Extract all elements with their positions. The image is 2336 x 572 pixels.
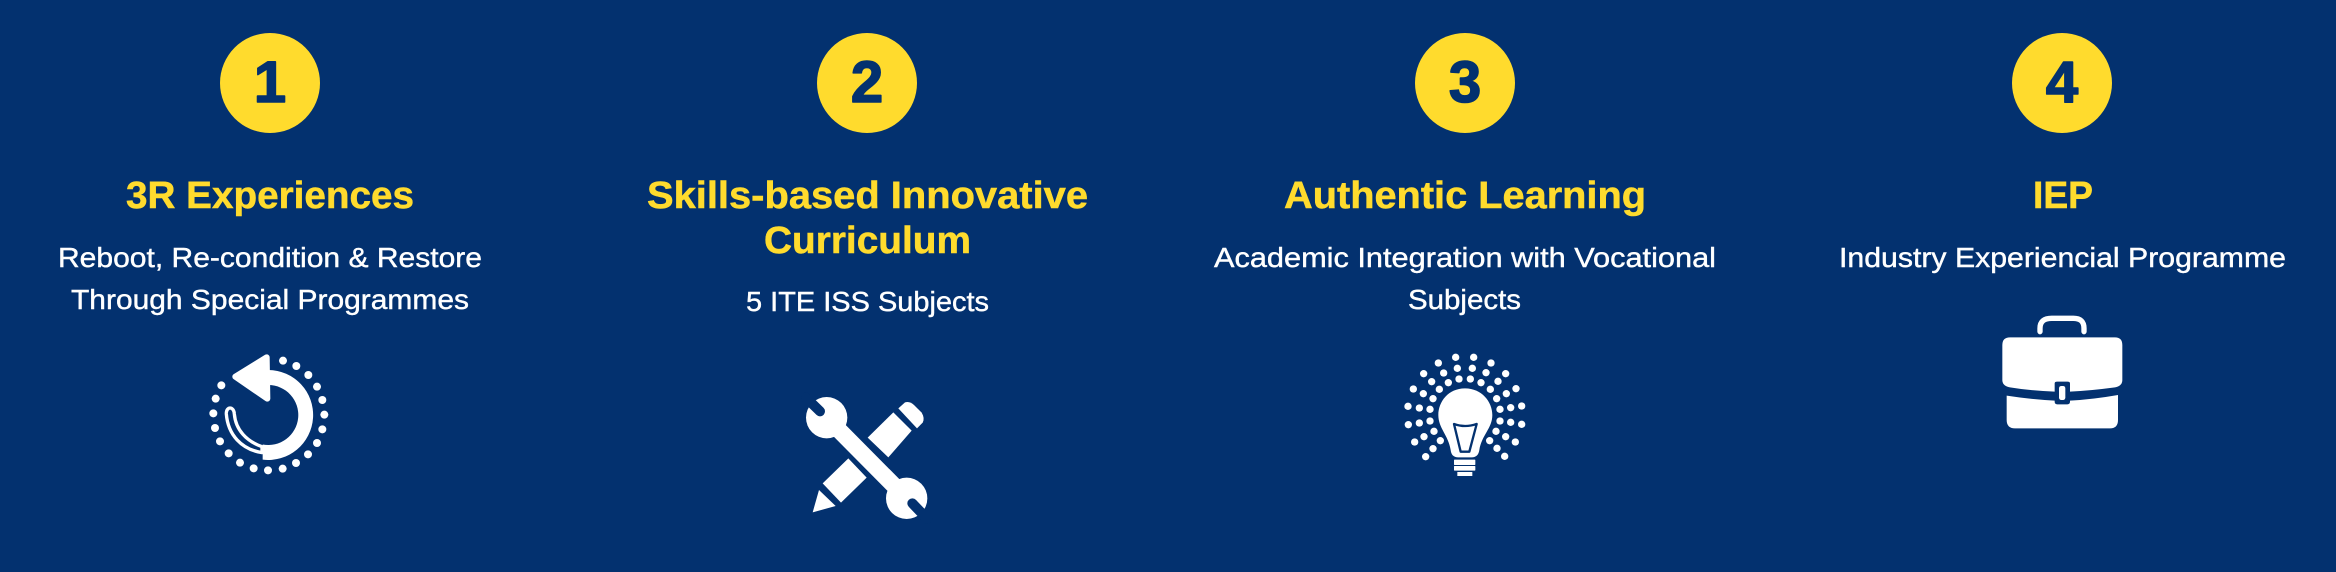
icon: restart arrow [209, 357, 328, 474]
number badge 2: 2 [851, 50, 883, 115]
description: 5 ITE ISS Subjects: 5 ITE ISS Subjects [746, 286, 989, 317]
panel: Skills-based Innovative Curriculum [647, 33, 1088, 519]
heading: Authentic Learning: Authentic Learning [1284, 175, 1646, 217]
heading: Skills-based Innovative Curriculum: Curriculum [764, 220, 971, 262]
panel: IEP [1839, 33, 2286, 428]
description: 3R Experiences: Through Special Programmes [71, 284, 469, 315]
icon: wrench and pencil [806, 397, 927, 519]
heading: 3R Experiences: 3R Experiences [126, 175, 414, 217]
description: Authentic Learning: Subjects [1408, 284, 1521, 315]
number badge 4: 4 [2046, 50, 2078, 115]
description: 3R Experiences: Reboot, Re-condition & Restore [58, 242, 482, 273]
number badge 4 [2012, 33, 2112, 133]
heading: Skills-based Innovative Curriculum [647, 175, 1088, 262]
description: Industry Experiencial Programme: Industry Experiencial Programme [1839, 242, 2286, 273]
description: Authentic Learning: Academic Integration with Vocational [1214, 242, 1716, 273]
number badge 1: 1 [254, 50, 286, 115]
number badge 2 [817, 33, 917, 133]
description: Authentic Learning [1214, 242, 1716, 315]
heading: IEP: IEP [2033, 175, 2093, 217]
icon: light bulb [1404, 354, 1525, 476]
panel: Authentic Learning [1214, 33, 1716, 476]
icon: briefcase [2002, 318, 2122, 428]
panel: 3R Experiences [58, 33, 482, 474]
heading: Skills-based Innovative Curriculum: Skills-based Innovative [647, 175, 1088, 217]
number badge 1 [220, 33, 320, 133]
number badge 3: 3 [1449, 50, 1481, 115]
description: 3R Experiences [58, 242, 482, 315]
number badge 3 [1415, 33, 1515, 133]
